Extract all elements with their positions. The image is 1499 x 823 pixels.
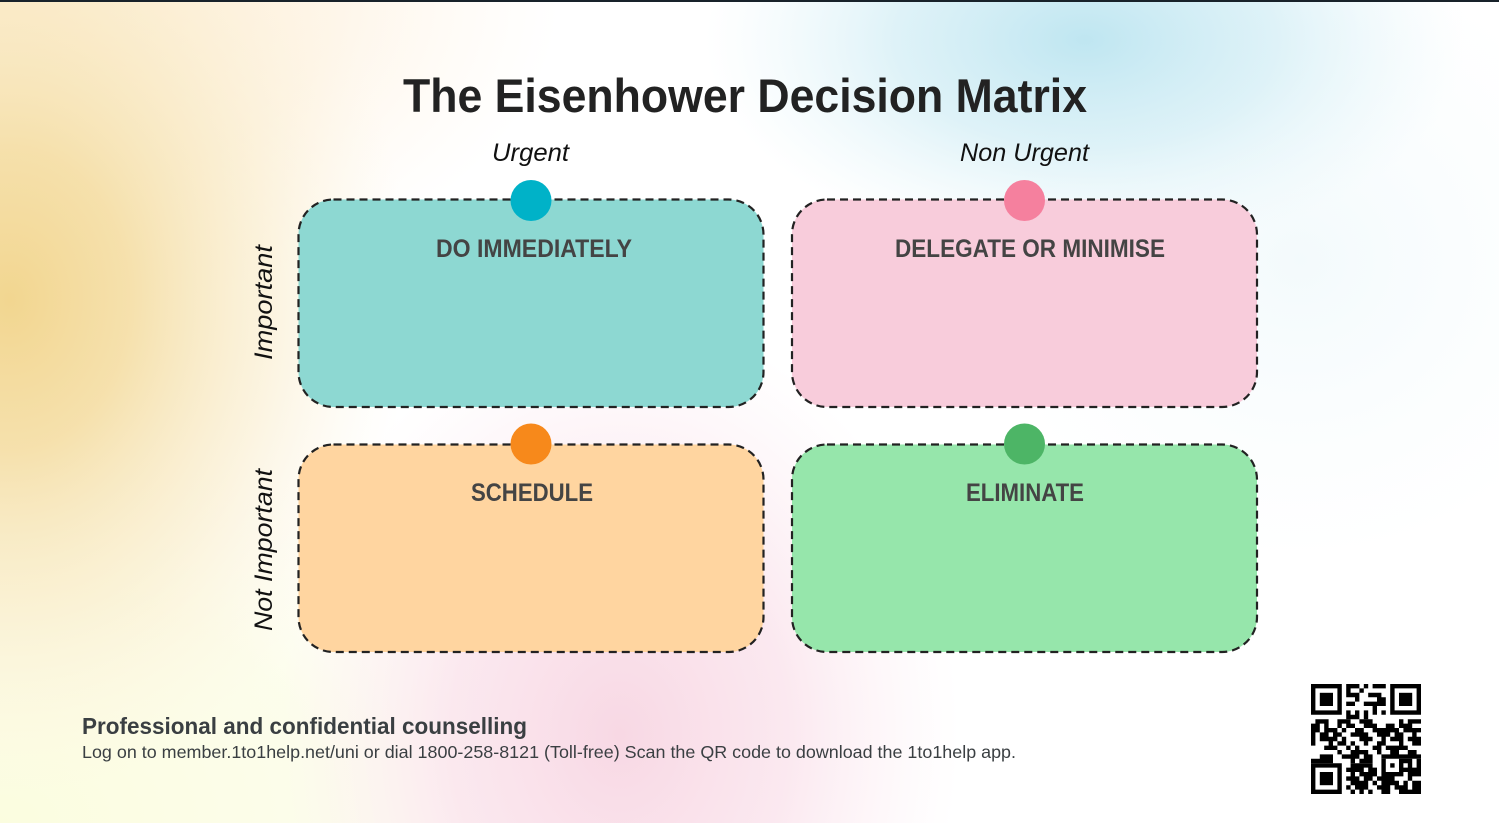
heading: schedule: SCHEDULE <box>471 479 593 507</box>
footer text: Log on to member.1to1help.net/uni or dial 1800-258-8121 (Toll-free) Scan the QR code to download the 1to1help app. <box>82 742 1016 762</box>
panel: do immediately <box>298 180 764 407</box>
marker: green dot <box>1004 424 1045 464</box>
panel: schedule <box>298 424 764 652</box>
heading: do immediately: DO IMMEDIATELY <box>436 235 632 263</box>
marker: pink dot <box>1004 180 1045 221</box>
title: The Eisenhower Decision Matrix <box>403 69 1087 122</box>
panel: delegate or minimise <box>792 180 1257 407</box>
column label: Urgent: Urgent <box>492 139 570 167</box>
marker: orange dot <box>510 424 552 464</box>
footer heading: Professional and confidential counselling <box>82 713 527 739</box>
column label: Non Urgent: Non Urgent <box>960 139 1090 167</box>
heading: delegate or minimise: DELEGATE OR MINIMISE <box>895 235 1165 263</box>
row label: Not Important: Not Important <box>250 468 278 631</box>
marker: teal dot <box>510 180 552 221</box>
panel: eliminate <box>792 424 1257 652</box>
row label: Important: Important <box>250 244 278 360</box>
icon: QR code <box>1311 684 1421 794</box>
heading: eliminate: ELIMINATE <box>966 479 1084 507</box>
